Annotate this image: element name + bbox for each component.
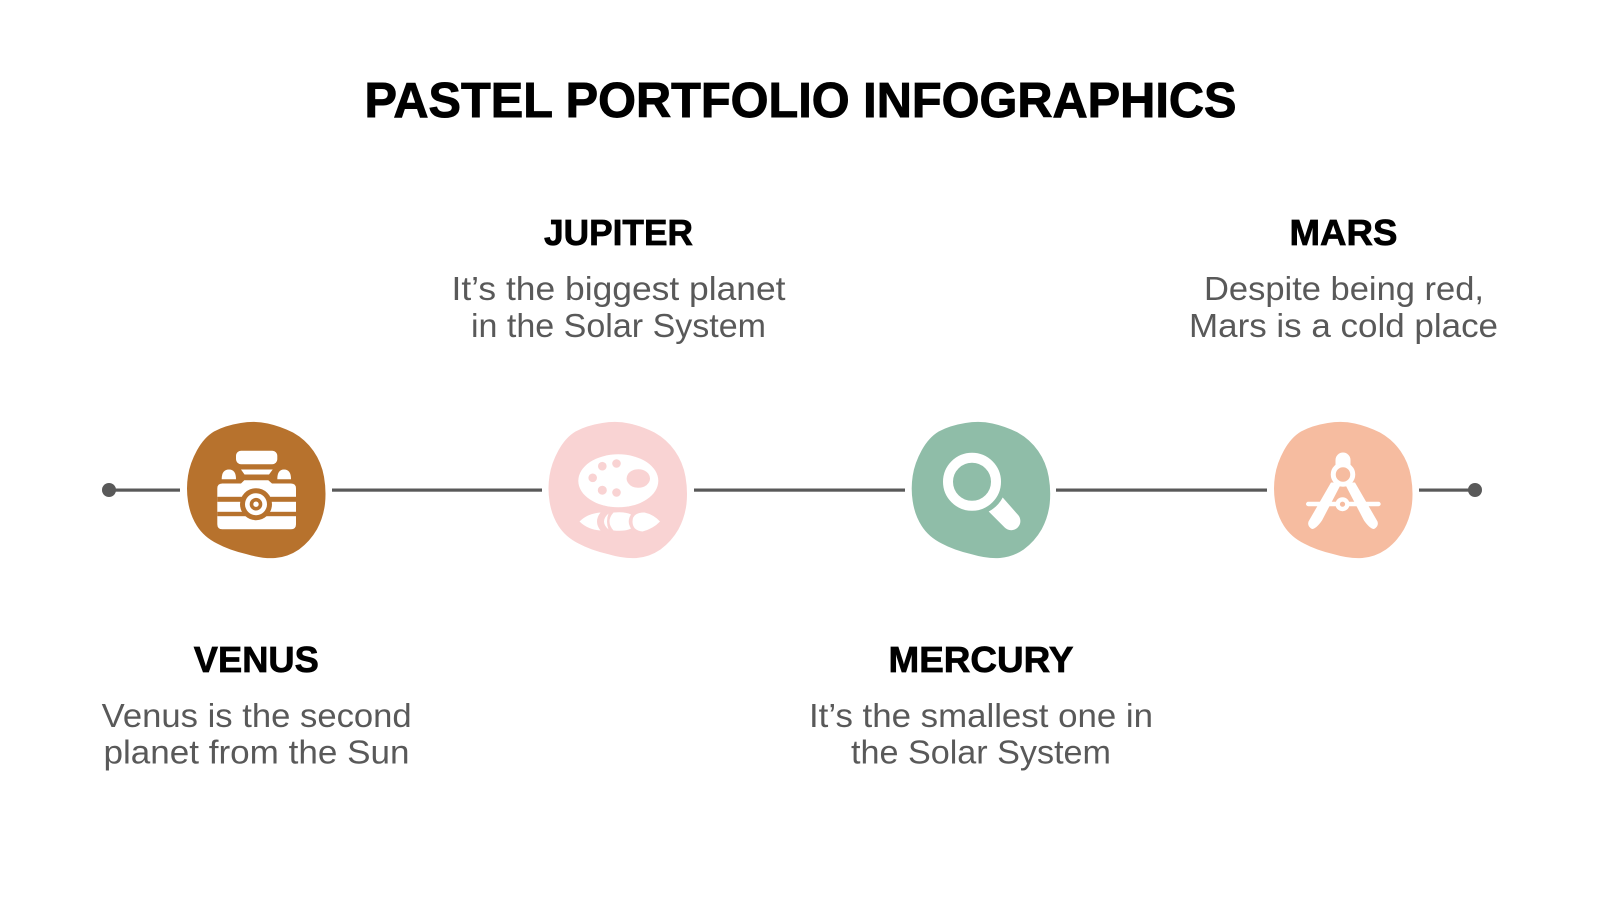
blob: green	[912, 422, 1050, 558]
text block: Venus: planet from the Sun	[104, 734, 409, 770]
step: Mars icon badge	[1274, 422, 1413, 558]
title: PASTEL PORTFOLIO INFOGRAPHICS	[364, 74, 1236, 128]
icon: palette and brush	[578, 454, 660, 532]
step: Mercury icon badge	[912, 422, 1050, 558]
text block: Mars: Mars is a cold place	[1189, 307, 1498, 344]
icon: camera	[217, 451, 296, 529]
timeline line with end dots	[102, 483, 1482, 497]
text block: Mercury	[809, 639, 1153, 770]
step: Venus icon badge	[187, 422, 326, 558]
text block: Venus	[102, 639, 412, 770]
text block: Jupiter: JUPITER	[544, 212, 693, 253]
text block: Venus: Venus is the second	[102, 697, 412, 734]
step: Jupiter icon badge	[548, 422, 687, 558]
icon: drawing compass	[1306, 452, 1381, 529]
text block: Jupiter	[452, 212, 786, 344]
text block: Mercury: It’s the smallest one in	[809, 697, 1153, 734]
text block: Jupiter: It’s the biggest planet	[452, 270, 786, 307]
icon: magnifying glass	[948, 458, 1020, 530]
text block: Mercury: MERCURY	[888, 639, 1074, 680]
blob: pink	[548, 422, 687, 558]
text block: Mercury: the Solar System	[851, 734, 1111, 770]
text block: Mars: MARS	[1290, 212, 1398, 253]
blob: peach	[1274, 422, 1413, 558]
text block: Jupiter: in the Solar System	[471, 307, 766, 344]
text block: Venus: VENUS	[194, 639, 319, 680]
blob: brown	[187, 422, 326, 558]
text block: Mars: Despite being red,	[1204, 270, 1484, 307]
text block: Mars	[1189, 212, 1498, 344]
